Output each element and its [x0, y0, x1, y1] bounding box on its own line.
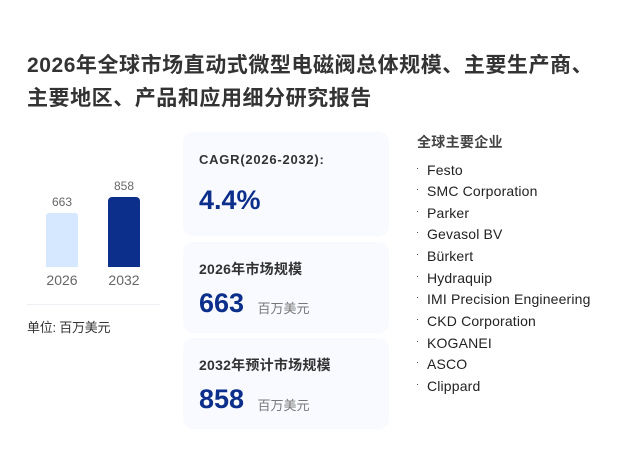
title: 2026年全球市场直动式微型电磁阀总体规模、主要生产商、	[27, 54, 593, 77]
2026 unit: 百万美元	[258, 301, 310, 316]
companies list: Bürkert	[427, 248, 473, 264]
title: 主要地区、产品和应用细分研究报告	[27, 87, 372, 110]
companies list: ASCO	[427, 356, 467, 372]
2032 unit: 百万美元	[258, 398, 310, 413]
companies list: SMC Corporation	[427, 183, 538, 199]
companies list: Clippard	[427, 378, 480, 394]
category label 2026: 2026	[46, 272, 78, 288]
value label 2032: 858	[114, 179, 134, 193]
2032 label: 2032年预计市场规模	[199, 357, 331, 373]
bar 2026	[46, 213, 78, 267]
panel: CAGR	[183, 132, 389, 236]
companies list: Parker	[427, 205, 469, 221]
unit note: 单位: 百万美元	[27, 320, 110, 335]
panel: 2026 market size	[183, 242, 389, 333]
companies list: IMI Precision Engineering	[427, 291, 591, 307]
bar 2032	[108, 197, 140, 267]
companies list: Festo	[427, 162, 463, 178]
companies list: Gevasol BV	[427, 226, 503, 242]
2026 value: 663	[199, 288, 244, 318]
panel: 2032 market size	[183, 338, 389, 429]
2032 value: 858	[199, 384, 244, 414]
companies heading: 全球主要企业	[417, 134, 503, 150]
companies list: CKD Corporation	[427, 313, 536, 329]
value label 2026: 663	[52, 195, 72, 209]
CAGR value: 4.4%	[199, 185, 261, 215]
companies list: KOGANEI	[427, 335, 492, 351]
category label 2032: 2032	[108, 272, 140, 288]
bar chart	[46, 179, 140, 288]
companies list: Hydraquip	[427, 270, 492, 286]
CAGR label: CAGR(2026-2032):	[199, 152, 325, 167]
2026 label: 2026年市场规模	[199, 261, 302, 277]
companies list	[417, 162, 591, 394]
title	[27, 54, 593, 110]
